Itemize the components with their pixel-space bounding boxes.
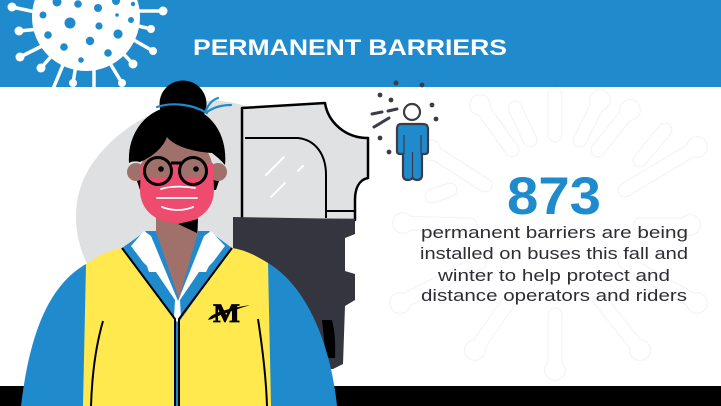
yellow vest [83,248,271,406]
icon: person with droplets [372,80,438,180]
neck shadow [178,219,198,233]
hair tie [157,98,231,113]
title: PERMANENT BARRIERS [193,35,507,60]
face [141,134,213,210]
hair bun [160,80,206,128]
glasses [144,158,206,184]
collar [122,231,232,322]
description text: installed on buses this fall and [420,245,688,263]
jacket sleeves [21,263,337,406]
header band [0,0,721,87]
logo: M [213,299,240,328]
eyes [158,166,199,172]
ears [127,163,227,181]
icon: virus [8,0,168,89]
description text: distance operators and riders [421,287,687,305]
faint background virus [400,95,697,370]
glasses lenses [145,158,206,184]
vest outlines and zipper [91,248,267,406]
big number: 873 [507,167,601,226]
panel: bus seat base [233,217,355,369]
hair lower nape [136,178,220,190]
description text: winter to help protect and [437,267,670,285]
face mask [140,163,214,223]
neck [156,215,198,299]
grey backdrop circle [76,101,245,266]
logo [208,299,250,328]
bottom black band [0,386,721,406]
description text: permanent barriers are being [421,224,688,242]
hair [129,106,225,165]
lens lower reflection of mask [147,178,204,183]
mask pleats [157,187,197,210]
description text [420,224,688,305]
person figure [21,80,337,406]
panel: bus barrier shield [242,103,368,220]
